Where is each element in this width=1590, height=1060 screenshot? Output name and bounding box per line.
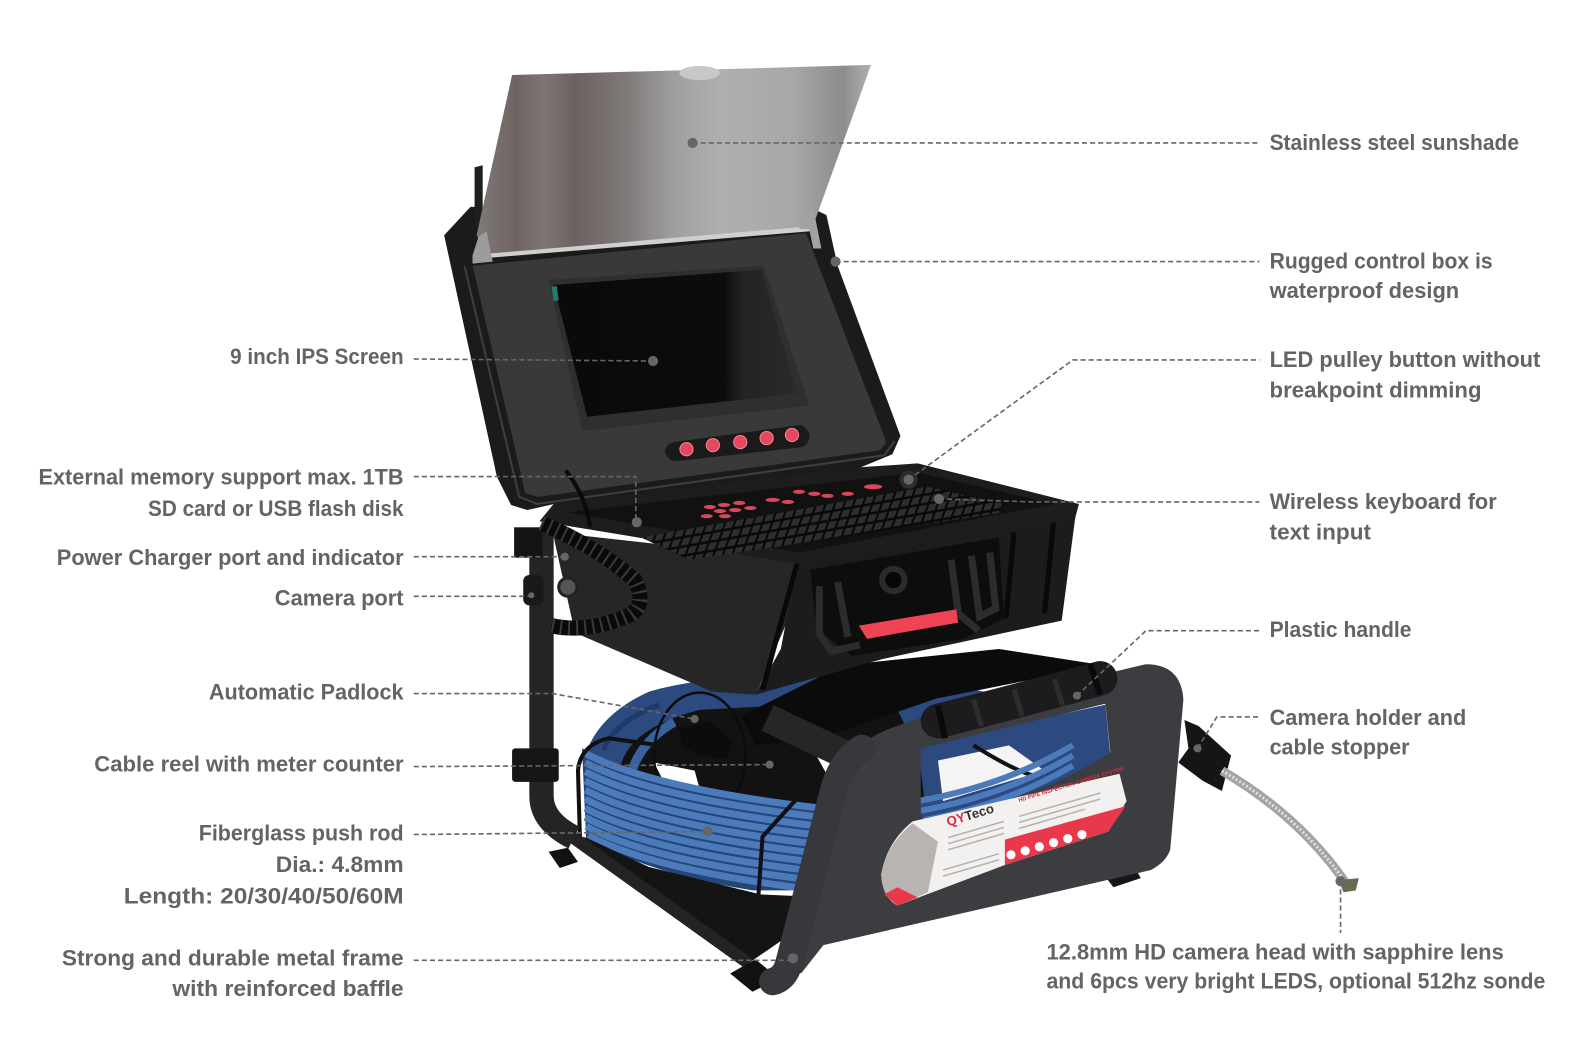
callout lines and dots [414, 138, 1346, 963]
label: 9 inch IPS screen: 9 inch IPS Screen [230, 344, 404, 369]
label: camera port: Camera port [275, 585, 404, 610]
control knob [899, 471, 918, 489]
label: stainless steel sunshade: Stainless steel sunshade [1270, 130, 1519, 155]
label: fiberglass push rod: Fiberglass push rod [199, 821, 404, 846]
screen indicator [552, 286, 559, 301]
label: plastic handle: Plastic handle [1270, 617, 1412, 642]
reel: right coil seen through frame window [918, 705, 1110, 826]
opened lid [444, 207, 900, 527]
label icons [1006, 830, 1087, 859]
metal stand: base plate [549, 835, 1141, 992]
control box body [553, 505, 1077, 695]
latches [819, 553, 996, 651]
callout: plastic handle [1073, 631, 1259, 700]
frame leg tube [773, 748, 862, 982]
label: automatic padlock: Automatic Padlock [209, 680, 404, 705]
label: external memory: External memory support max. 1TB [39, 465, 404, 490]
label: fiberglass push rod [124, 821, 404, 909]
callout: control box [830, 257, 1259, 267]
callout: sunshade [688, 138, 1259, 148]
label text lines [943, 793, 1100, 876]
lid inner panel [473, 233, 886, 497]
label: LED pulley button: LED pulley button without [1270, 347, 1540, 372]
callout: keyboard [934, 494, 1259, 504]
label: camera head [1046, 939, 1545, 994]
reel: blue front coil stack [582, 748, 832, 890]
plastic grip handle [938, 664, 1100, 738]
label: camera holder: cable stopper [1270, 734, 1410, 759]
coiled cable [541, 523, 640, 628]
label: LED pulley button: breakpoint dimming [1270, 378, 1481, 403]
red handle [859, 609, 958, 639]
screen [554, 270, 797, 417]
product: pipe inspection camera system [444, 65, 1359, 992]
frame panel [786, 664, 1183, 973]
keyboard keys [641, 487, 1004, 560]
callout: camera head [1335, 876, 1346, 933]
cable reel: back coil [585, 674, 1077, 862]
label: camera holder: Camera holder and [1270, 705, 1466, 730]
callout: padlock [414, 694, 699, 723]
reel: black wire retaining bars [578, 738, 872, 894]
label: cable reel: Cable reel with meter counter [94, 752, 404, 777]
label: camera head: 12.8mm HD camera head with sapphire lens [1046, 939, 1504, 964]
label: LED pulley button [1270, 347, 1540, 403]
callout: screen [414, 356, 658, 366]
label title: HD PIPE INSPECTION CAMERA SYSTEM [1018, 766, 1125, 804]
label: power charger: Power Charger port and indicator [57, 545, 404, 570]
label: camera head: and 6pcs very bright LEDS, optional 512hz sonde [1046, 969, 1545, 994]
frame side tube stub [768, 718, 847, 755]
stainless steel sunshade [473, 65, 871, 264]
callout: fiberglass rod [414, 826, 713, 837]
callout: metal frame [414, 953, 798, 963]
label: external memory [39, 465, 404, 521]
callout: memory [414, 477, 642, 527]
label: fiberglass push rod: Dia.: 4.8mm [276, 852, 404, 877]
label: wireless keyboard [1270, 489, 1497, 544]
callout: LED button [904, 360, 1259, 485]
label: metal frame [62, 945, 404, 1001]
screen bezel [549, 266, 809, 431]
label: rugged control box: waterproof design [1269, 278, 1459, 303]
label: metal frame: Strong and durable metal frame [62, 945, 404, 970]
box front face [755, 505, 1077, 695]
label: wireless keyboard: Wireless keyboard for [1270, 489, 1497, 514]
label: rugged control box: Rugged control box is [1270, 249, 1493, 274]
cable on lid [566, 471, 590, 527]
label: camera holder [1270, 705, 1466, 759]
keyboard deck [539, 463, 1079, 564]
label: metal frame: with reinforced baffle [171, 976, 404, 1001]
red function buttons [701, 484, 882, 518]
camera holder and gooseneck [1178, 720, 1359, 892]
latch recess with knob [810, 537, 1004, 656]
callout: cable reel [414, 761, 774, 769]
metal stand: rear pole with clips and knob [512, 527, 574, 838]
callout: camera holder [1194, 717, 1259, 752]
hinges [473, 231, 493, 264]
box left face [553, 532, 798, 695]
lid frame [444, 207, 900, 510]
label: fiberglass push rod: Length: 20/30/40/50/60M [124, 884, 404, 909]
padlock [679, 722, 732, 758]
label: rugged control box [1269, 249, 1493, 303]
logo: QYTeco [945, 801, 996, 829]
front frame with handle [768, 664, 1183, 982]
product label sticker [881, 766, 1127, 906]
touch button strip [665, 425, 810, 461]
black mount under control box [741, 649, 1103, 745]
callout: camera port [414, 592, 534, 598]
label: external memory: SD card or USB flash disk [148, 496, 404, 521]
side connector [559, 578, 577, 596]
callout: power [414, 553, 569, 561]
label: wireless keyboard: text input [1270, 519, 1371, 544]
